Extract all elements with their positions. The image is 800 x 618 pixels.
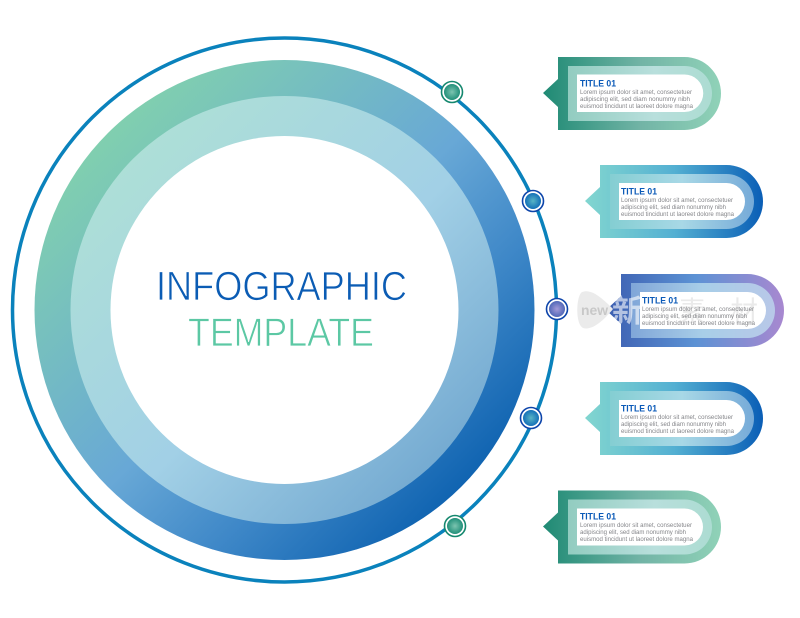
watermark: 素材 — [678, 296, 758, 327]
card 1 text: Lorem ipsum dolor sit amet, consectetuer — [580, 89, 692, 96]
card 3 text: adipiscing elit, sed diam nonummy nibh — [642, 313, 747, 320]
card 1 text: adipiscing elit, sed diam nonummy nibh — [580, 96, 690, 103]
card 3 — [606, 274, 784, 347]
white centre disc — [110, 136, 458, 484]
node 1 — [442, 82, 462, 102]
card 5 text: adipiscing elit, sed diam nonummy nibh — [580, 529, 686, 536]
heading: infographic template — [156, 263, 407, 355]
card 1 — [543, 57, 721, 130]
node 3 — [546, 298, 568, 320]
card 3 text: Lorem ipsum dolor sit amet, consectetuer — [642, 306, 754, 313]
central ring diagram — [34, 60, 534, 560]
card 2 — [585, 165, 763, 238]
card 1 text — [580, 89, 693, 110]
card 1 title: TITLE 01 — [580, 78, 617, 90]
card 4 text: Lorem ipsum dolor sit amet, consectetuer — [621, 414, 733, 421]
card 4 — [585, 382, 763, 455]
card 2 title: TITLE 01 — [621, 186, 658, 198]
card 3 title: TITLE 01 — [642, 296, 679, 306]
card 5 text: Lorem ipsum dolor sit amet, consectetuer — [580, 522, 692, 529]
card 4 text: euismod tincidunt ut laoreet dolore magna — [621, 428, 734, 435]
card 5 text: euismod tincidunt ut laoreet dolore magna — [580, 536, 693, 543]
watermark characters: 新 — [612, 294, 643, 329]
watermark — [577, 291, 758, 329]
inner light ring — [70, 96, 498, 524]
card 5 title: TITLE 01 — [580, 512, 617, 522]
node 5 — [444, 516, 466, 536]
node 2 — [522, 190, 544, 212]
outer circle line — [12, 38, 556, 582]
card 2 text — [621, 197, 734, 218]
card 3 text: euismod tincidunt ut laoreet dolore magna — [642, 320, 755, 327]
card 1 text: euismod tincidunt ut laoreet dolore magna — [580, 103, 693, 110]
watermark badge — [577, 291, 613, 329]
card 4 text: adipiscing elit, sed diam nonummy nibh — [621, 421, 726, 428]
card 3 text — [642, 306, 755, 327]
card 4 text — [621, 414, 734, 435]
node 4 — [520, 408, 542, 428]
card 2 text: Lorem ipsum dolor sit amet, consectetuer — [621, 197, 733, 204]
card 2 text: euismod tincidunt ut laoreet dolore magna — [621, 211, 734, 218]
card 4 title: TITLE 01 — [621, 404, 658, 414]
outer gradient ring — [34, 60, 534, 560]
card 5 — [543, 490, 721, 564]
watermark label: new — [581, 302, 608, 318]
card 5 text — [580, 522, 693, 543]
heading line 1: INFOGRAPHIC — [156, 263, 407, 309]
card 2 text: adipiscing elit, sed diam nonummy nibh — [621, 204, 726, 211]
heading line 2: TEMPLATE — [188, 311, 374, 355]
